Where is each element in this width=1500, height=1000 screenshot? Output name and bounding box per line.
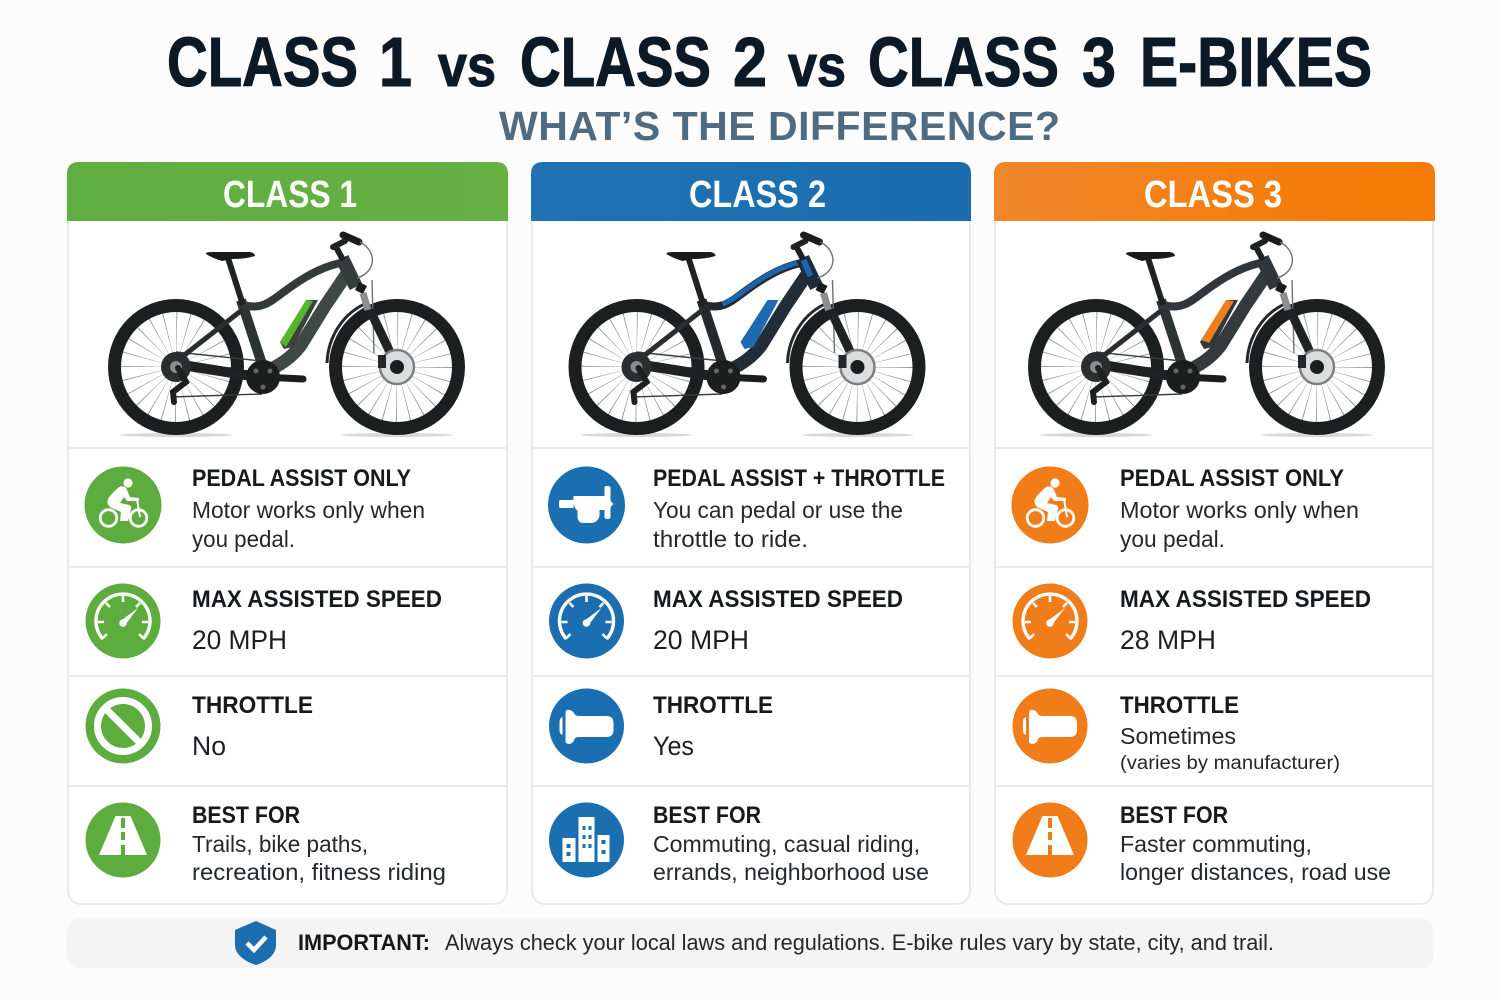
notice text: Always check your local laws and regulations. E-bike rules vary by state, city, and trail. xyxy=(445,930,1274,955)
title: CLASS xyxy=(868,23,1059,101)
icon: rider xyxy=(84,466,162,544)
best for text: longer distances, road use xyxy=(1120,859,1391,885)
icon: speedometer xyxy=(1012,584,1088,658)
icon: city buildings xyxy=(549,802,624,878)
throttle text: (varies by manufacturer) xyxy=(1120,753,1340,774)
best for text: errands, neighborhood use xyxy=(653,859,929,885)
best for text xyxy=(192,802,446,885)
best for text: Faster commuting, xyxy=(1120,831,1312,857)
icon: throttle xyxy=(549,688,624,764)
callout: important notice xyxy=(67,918,1434,968)
pedal assist plus throttle text: You can pedal or use the xyxy=(653,497,903,523)
throttle text: No xyxy=(192,731,226,761)
pedal assist text: PEDAL ASSIST ONLY xyxy=(192,465,411,492)
class 1 header: CLASS 1 xyxy=(223,174,357,216)
icon: rider xyxy=(1012,466,1088,544)
best for text xyxy=(1120,802,1391,885)
title xyxy=(167,23,1372,101)
icon: throttle xyxy=(1012,688,1088,764)
class 3 header xyxy=(994,162,1435,221)
notice text: IMPORTANT: xyxy=(298,930,430,955)
pedal assist text: Motor works only when xyxy=(1120,497,1359,523)
pedal assist text xyxy=(192,465,425,552)
max speed text: 28 MPH xyxy=(1120,625,1216,655)
subtitle: WHAT’S THE DIFFERENCE? xyxy=(499,103,1060,149)
panel: class 3 xyxy=(994,162,1435,904)
throttle text xyxy=(192,692,313,761)
icon: road xyxy=(1012,802,1088,878)
best for text: BEST FOR xyxy=(653,802,761,829)
throttle text: THROTTLE xyxy=(1120,692,1239,719)
class 1 bike illustration xyxy=(114,235,458,437)
panel: class 2 xyxy=(531,162,971,904)
title: 3 xyxy=(1082,23,1116,101)
title: 1 xyxy=(379,23,412,101)
pedal assist text: you pedal. xyxy=(1120,526,1225,552)
icon: pedal and throttle xyxy=(548,466,625,544)
pedal assist plus throttle text: throttle to ride. xyxy=(653,526,808,552)
max speed text: MAX ASSISTED SPEED xyxy=(1120,586,1371,613)
max speed text: 20 MPH xyxy=(653,625,749,655)
throttle text: Sometimes xyxy=(1120,723,1236,749)
max speed text xyxy=(1120,586,1371,655)
class 2 header: CLASS 2 xyxy=(689,174,826,216)
panel: class 1 xyxy=(67,162,508,904)
icon: shield check xyxy=(235,921,276,965)
best for text: Commuting, casual riding, xyxy=(653,831,920,857)
throttle text xyxy=(653,692,773,761)
best for text: Trails, bike paths, xyxy=(192,831,368,857)
pedal assist plus throttle text xyxy=(653,465,945,552)
icon: speedometer xyxy=(86,584,160,658)
class 3 bike illustration xyxy=(1034,235,1378,437)
class 3 header: CLASS 3 xyxy=(1144,174,1282,216)
max speed text xyxy=(653,586,903,655)
pedal assist text: you pedal. xyxy=(192,526,295,552)
title: vs xyxy=(788,34,846,99)
icon: no throttle xyxy=(86,688,160,764)
icon: speedometer xyxy=(549,584,624,658)
title: CLASS xyxy=(167,23,358,101)
max speed text: 20 MPH xyxy=(192,625,287,655)
title: E-BIKES xyxy=(1140,23,1372,101)
throttle text: Yes xyxy=(653,731,694,761)
throttle text: THROTTLE xyxy=(653,692,773,719)
title: vs xyxy=(438,34,496,99)
class 1 header xyxy=(67,162,508,221)
max speed text xyxy=(192,586,442,655)
best for text: BEST FOR xyxy=(192,802,300,829)
class 2 bike illustration xyxy=(575,235,919,437)
pedal assist text: PEDAL ASSIST ONLY xyxy=(1120,465,1344,492)
title: CLASS xyxy=(520,23,711,101)
class 2 header xyxy=(531,162,971,221)
best for text xyxy=(653,802,929,885)
title: 2 xyxy=(733,23,767,101)
pedal assist text xyxy=(1120,465,1359,552)
best for text: recreation, fitness riding xyxy=(192,859,446,885)
best for text: BEST FOR xyxy=(1120,802,1228,829)
max speed text: MAX ASSISTED SPEED xyxy=(192,586,442,613)
max speed text: MAX ASSISTED SPEED xyxy=(653,586,903,613)
icon: road xyxy=(86,802,160,878)
pedal assist plus throttle text: PEDAL ASSIST + THROTTLE xyxy=(653,465,945,492)
throttle text xyxy=(1120,692,1340,774)
throttle text: THROTTLE xyxy=(192,692,313,719)
pedal assist text: Motor works only when xyxy=(192,497,425,523)
